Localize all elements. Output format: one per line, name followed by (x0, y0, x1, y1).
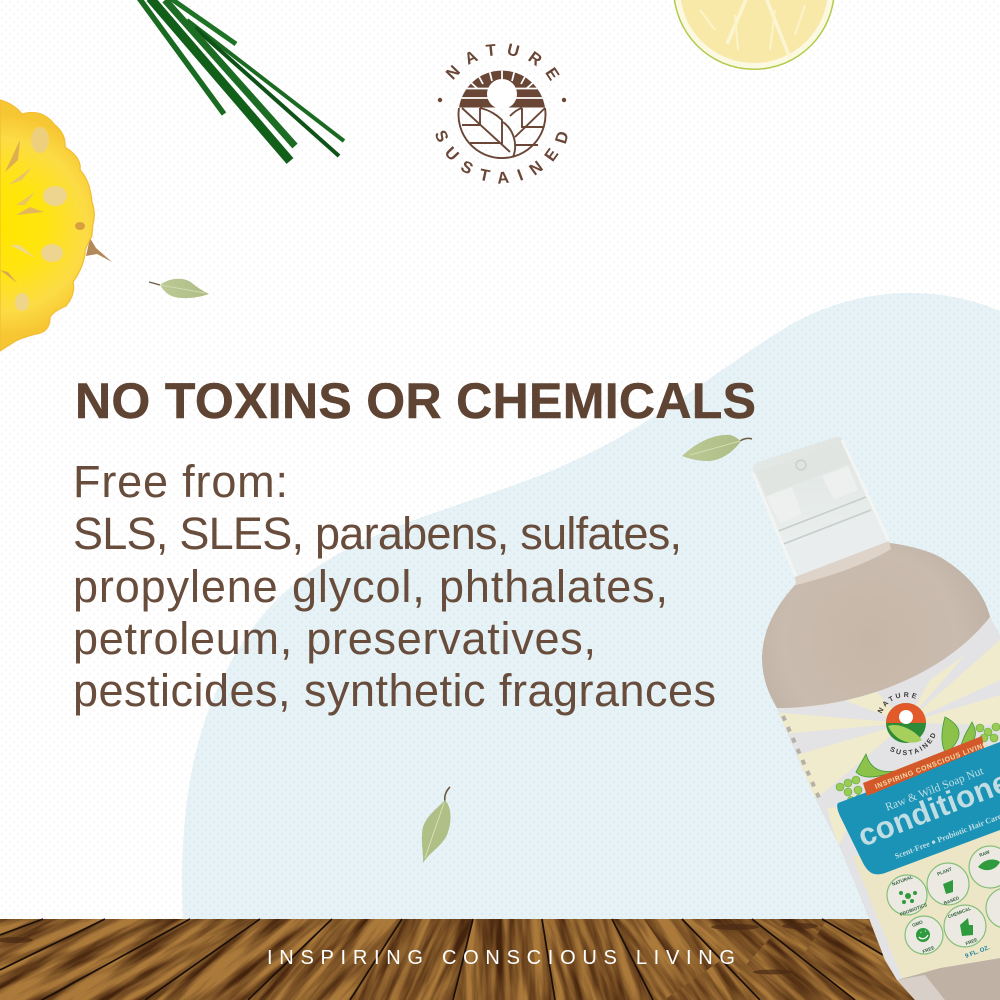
bottle body (762, 543, 1000, 1000)
badge labels: GMO (911, 919, 924, 928)
pale blue blob (182, 293, 1000, 920)
body text: free-from list (73, 456, 716, 716)
body text: free-from list: petroleum, preservatives, (73, 613, 596, 664)
body text: free-from list: propylene glycol, phthalates, (73, 561, 668, 612)
bottle base highlight (897, 975, 945, 1000)
wood floor (0, 919, 1000, 1000)
badge labels: CHEMICAL (947, 906, 972, 919)
label green leaves (856, 717, 975, 777)
body text: free-from list: pesticides, synthetic fragrances (73, 665, 716, 716)
label lower cream panel (853, 830, 1000, 978)
blue product panel (837, 742, 1000, 874)
heading: NO TOXINS OR CHEMICALS (75, 373, 756, 429)
small leaf upper left (149, 279, 209, 298)
label logo (878, 692, 936, 756)
bottle cap (753, 437, 889, 577)
label sun rays (770, 640, 1000, 800)
badge labels: PLANT (936, 866, 953, 877)
logo emblem (458, 70, 546, 159)
badge labels: BASED (943, 895, 960, 906)
logo ring text: sustained: SUSTAINED (436, 130, 568, 184)
bottle collar (795, 541, 891, 585)
label soap-nut berries (836, 723, 1000, 804)
benefit badges (887, 846, 1000, 954)
badge labels: PROBIOTICS (899, 902, 928, 917)
product name text: Raw & Wild Soap Nut (884, 765, 986, 814)
badge labels (891, 849, 991, 954)
badge icons (899, 859, 1000, 942)
plank grain (0, 919, 1000, 1000)
badge labels: RAW (979, 849, 991, 858)
net volume text: 9 FL. OZ. (965, 945, 991, 960)
bottle label (777, 617, 1000, 980)
pineapple slice (0, 100, 112, 351)
badge labels: FREE (922, 945, 935, 954)
leaf near bottle (682, 435, 752, 461)
plank seams (0, 919, 883, 1000)
product name text: Scent-Free ● Probiotic Hair Care (893, 812, 1000, 861)
label logo: NATURE (878, 692, 917, 714)
body text: free-from list: Free from: (73, 456, 288, 507)
wood knots (0, 923, 818, 974)
label side print marks (783, 716, 820, 800)
smiley face (919, 931, 928, 939)
body text: free-from list: SLS, SLES, parabens, sulfates, (73, 508, 682, 559)
badge labels: NATURAL (891, 874, 914, 887)
tagline: INSPIRING CONSCIOUS LIVING (267, 947, 735, 969)
logo ring text: nature: NATURE (445, 43, 560, 81)
chive stalks (139, 0, 344, 161)
conditioner bottle (752, 437, 1000, 1000)
leaf lower centre (422, 787, 451, 863)
badge labels: FREE (965, 937, 978, 946)
label logo: SUSTAINED (890, 733, 936, 756)
orange banner: INSPIRING CONSCIOUS LIVING (874, 741, 990, 791)
brand logo (436, 43, 568, 184)
lemon slice (673, 0, 835, 70)
